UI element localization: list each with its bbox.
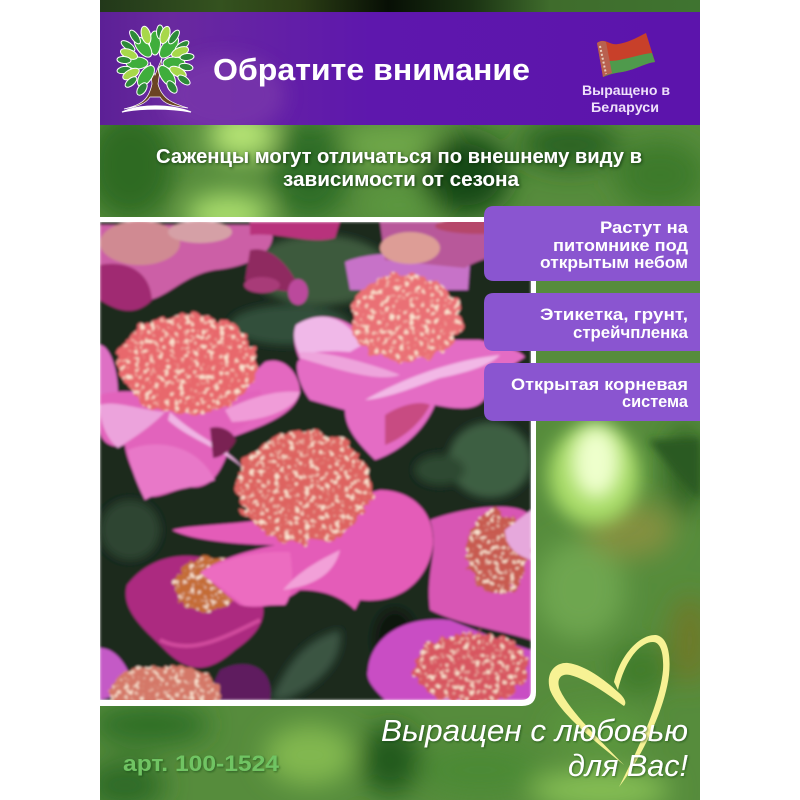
caption: grown in Belarus: Беларуси [591,100,659,115]
article number: арт. 100-1524 [123,751,280,776]
card: open root system: Открытая корневая [511,375,688,394]
subtitle: Саженцы могут отличаться по внешнему виду в [156,146,642,168]
icon: yellow heart [549,635,670,787]
subtitle [156,146,642,191]
card: outdoor nursery [484,206,700,281]
card: label, soil, stretch film: Этикетка, грунт, [540,305,688,324]
card: outdoor nursery: Растут на [600,218,689,237]
flower F [367,619,531,700]
caption: grown in Belarus: Выращено в [582,83,670,98]
logo: tree [116,25,194,112]
info cards [484,206,700,421]
flower E [429,507,531,640]
background flowers [100,225,273,309]
foliage [100,235,532,700]
flower G [100,646,130,700]
card: open root system: система [622,392,689,411]
icon: Belarus flag [597,33,655,77]
flower D petals [126,556,263,668]
flower C [172,490,433,610]
subtitle: зависимости от сезона [283,169,520,191]
card: outdoor nursery: открытым небом [540,253,688,272]
flower B [294,317,525,460]
card: label, soil, stretch film: стрейчпленка [573,323,689,342]
card: open root system [484,363,700,421]
photo: peonies [100,218,532,718]
flower D stamens [174,558,240,612]
flower A [100,342,120,396]
card: outdoor nursery: питомнике под [553,236,688,255]
slogan [381,713,688,783]
header band [100,12,700,135]
blurred green background [85,0,712,800]
card: label, soil, stretch film [484,293,700,351]
caption: grown in Belarus [582,83,670,115]
slogan: Выращен с любовью [381,713,688,748]
photo frame [100,217,536,706]
slogan: для Вас! [568,748,688,783]
title: Обратите внимание [213,52,530,87]
